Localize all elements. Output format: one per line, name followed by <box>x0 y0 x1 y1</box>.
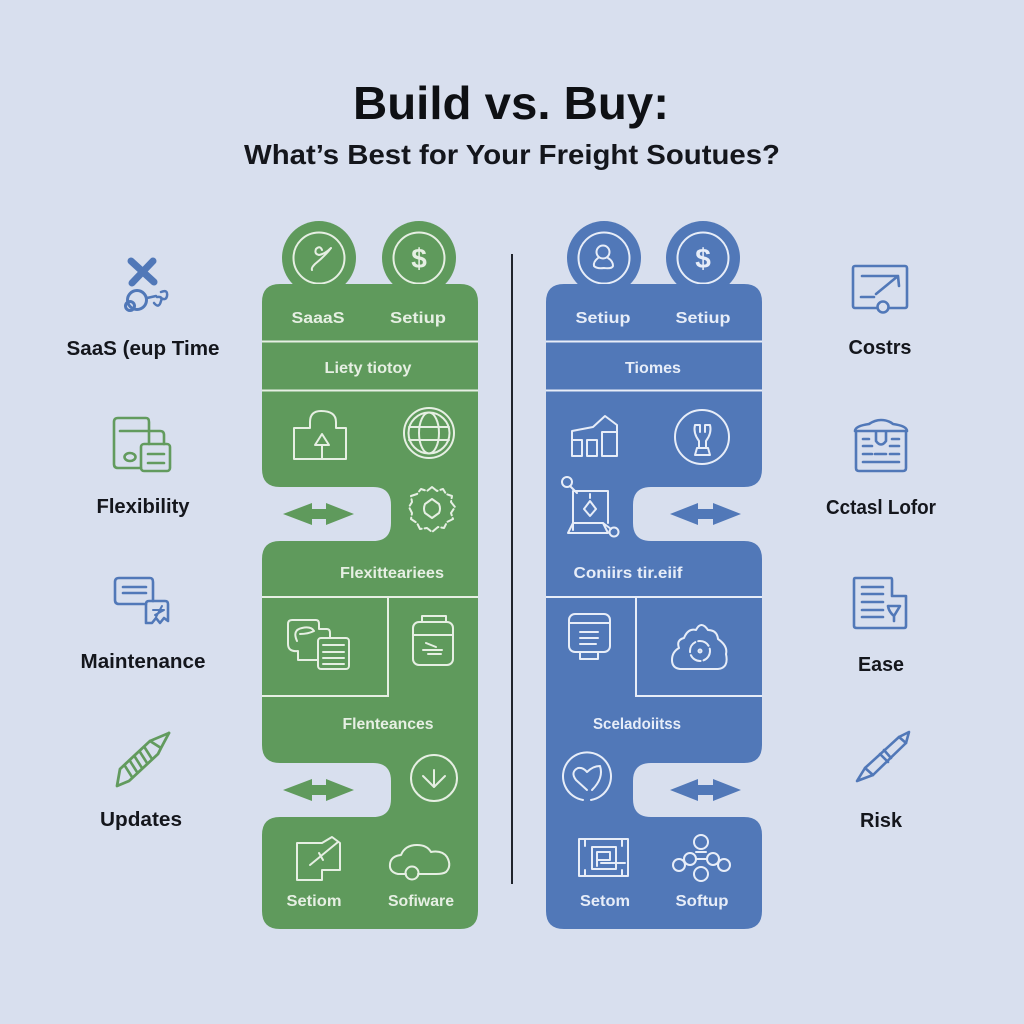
label: Setom: Setom <box>580 893 630 910</box>
center divider line <box>511 254 513 884</box>
arrow: left-right bottom <box>670 779 741 801</box>
icon: jar <box>413 616 453 665</box>
label: SaaS setup time: SaaS (eup Time <box>66 338 220 360</box>
label: Cctasl Lofor: Cctasl Lofor <box>826 497 936 519</box>
icon: network nodes <box>673 835 730 881</box>
label: Contrs tir.etif: Coniirs tir.eiif <box>574 565 683 582</box>
icon: bar chart <box>572 416 617 456</box>
icon: locked house upload <box>294 411 346 459</box>
panel: green build column <box>262 221 478 929</box>
label: risk: Risk <box>860 810 903 832</box>
icon: tool kit <box>562 477 618 536</box>
header badge: percent <box>282 221 356 295</box>
icon: cost basket <box>855 420 907 471</box>
label: Sceladoiitss: Sceladoiitss <box>593 716 681 733</box>
icon: framed blueprint <box>579 839 628 876</box>
header badge: dollar <box>382 221 456 295</box>
title: What’s Best for Your Freight Soutues? <box>244 139 780 170</box>
icon: maintenance card <box>115 578 168 623</box>
arrow: left-right top <box>283 503 354 525</box>
left criteria column <box>66 261 220 831</box>
icon: ease document <box>854 578 906 628</box>
icon: globe <box>404 408 454 458</box>
icon: heart circle <box>563 752 611 800</box>
icon: cloud with target <box>672 625 727 669</box>
label: costs: Costrs <box>848 337 912 359</box>
icon: map chart <box>297 837 340 880</box>
label: Tiomes: Tiomes <box>625 360 681 377</box>
label: maintenance: Maintenance <box>80 651 206 673</box>
label: Softup: Softup <box>676 893 729 910</box>
icon: risk pen <box>857 732 909 781</box>
icon: cross and nodes <box>126 261 167 310</box>
header badge: dollar <box>666 221 740 295</box>
label: Flexitteariees: Flexitteariees <box>340 565 444 582</box>
panel body <box>262 284 478 929</box>
label: SaaaS: SaaaS <box>292 310 345 327</box>
label: Software: Sofiware <box>388 893 454 910</box>
label: updates: Updates <box>100 809 182 831</box>
icon: printer document <box>569 614 610 659</box>
icon: trophy circle <box>675 410 729 464</box>
panel body <box>546 284 762 929</box>
header badge: dollar: $ <box>411 243 427 274</box>
title: Build vs. Buy: <box>353 77 669 129</box>
icon: download circle <box>411 755 457 801</box>
icon: gear <box>409 487 455 532</box>
title <box>244 77 780 170</box>
label: Setup right: Setiup <box>676 310 731 327</box>
header badge: dollar: $ <box>695 243 711 274</box>
label: Flenteances: Flenteances <box>342 716 434 733</box>
icon: costs screen <box>853 266 907 312</box>
label: Liety tiotoy: Liety tiotoy <box>324 360 412 377</box>
label: ease: Ease <box>858 654 904 676</box>
label: Setiom: Setiom <box>286 893 342 910</box>
label: Setup left: Setiup <box>576 310 631 327</box>
icon: updates pencil <box>117 733 169 786</box>
icon: flexibility documents <box>114 418 170 471</box>
panel: blue buy column <box>546 221 762 929</box>
label: Setup: Setiup <box>390 310 446 327</box>
right criteria column <box>826 266 936 832</box>
arrow: left-right bottom <box>283 779 354 801</box>
header badge: person <box>567 221 641 295</box>
arrow: left-right top <box>670 503 741 525</box>
label: flexibility: Flexibility <box>96 496 190 518</box>
icon: cloud <box>390 845 449 880</box>
icon: chat and document <box>288 620 349 669</box>
